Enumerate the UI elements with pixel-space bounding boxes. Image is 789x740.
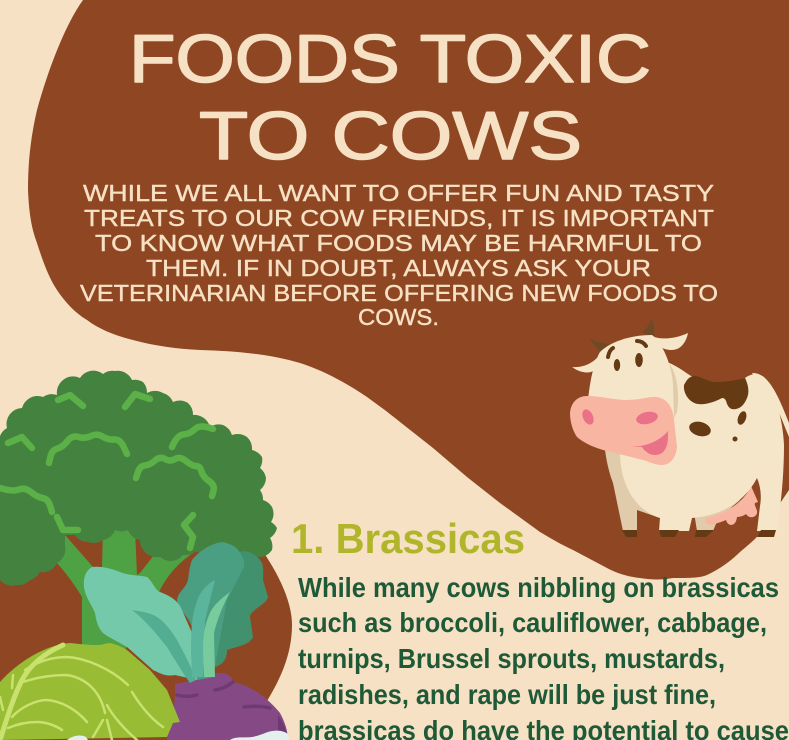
icon: cabbage	[0, 643, 180, 740]
cow head	[588, 335, 674, 445]
white fragment	[67, 736, 88, 740]
title: TO COWS	[199, 98, 582, 174]
intro paragraph: VETERINARIAN BEFORE OFFERING NEW FOODS TO	[80, 280, 718, 306]
turnip shade	[278, 715, 288, 740]
broccoli highlights	[0, 394, 214, 548]
heading: 1. Brassicas: 1. Brassicas	[291, 515, 525, 562]
icon: white vegetable	[230, 731, 289, 740]
body text: radishes, and rape will be just fine,	[298, 679, 716, 710]
turnip marks	[177, 682, 270, 708]
icon: turnip with leaves	[84, 542, 288, 740]
spots	[684, 376, 748, 409]
brown lower-left blob	[0, 510, 292, 740]
hooves	[622, 530, 776, 537]
ears	[572, 352, 602, 373]
cow tail	[752, 373, 789, 437]
eyes	[614, 359, 620, 371]
turnip bulb	[167, 673, 288, 740]
cow far legs and shaded body	[605, 440, 740, 531]
muzzle	[570, 396, 677, 465]
icon: cow	[570, 318, 789, 537]
icon: broccoli	[0, 371, 277, 650]
intro paragraph	[80, 180, 718, 330]
brown header blob	[28, 0, 789, 580]
leaf ribs	[132, 610, 196, 683]
dark back leaf	[200, 551, 268, 667]
title: FOODS TOXIC	[129, 21, 651, 97]
cow body	[620, 362, 784, 531]
intro paragraph: COWS.	[358, 304, 439, 330]
title	[129, 21, 651, 174]
broccoli stems	[57, 530, 193, 650]
intro paragraph: THEM. IF IN DOUBT, ALWAYS ASK YOUR	[146, 255, 651, 281]
intro paragraph: TO KNOW WHAT FOODS MAY BE HARMFUL TO	[95, 230, 702, 256]
nostrils	[580, 408, 596, 426]
body text	[298, 572, 789, 740]
body text: turnips, Brussel sprouts, mustards,	[298, 643, 725, 674]
intro paragraph: TREATS TO OUR COW FRIENDS, IT IS IMPORTANT	[84, 205, 714, 231]
light leaf	[84, 567, 197, 680]
mouth	[630, 431, 668, 455]
horns	[589, 338, 609, 352]
intro paragraph: WHILE WE ALL WANT TO OFFER FUN AND TASTY	[83, 180, 714, 206]
cabbage veins	[0, 645, 163, 740]
mid leaf	[177, 542, 244, 680]
neck shadow	[666, 362, 678, 422]
broccoli crown	[0, 371, 277, 586]
udder	[705, 486, 758, 525]
